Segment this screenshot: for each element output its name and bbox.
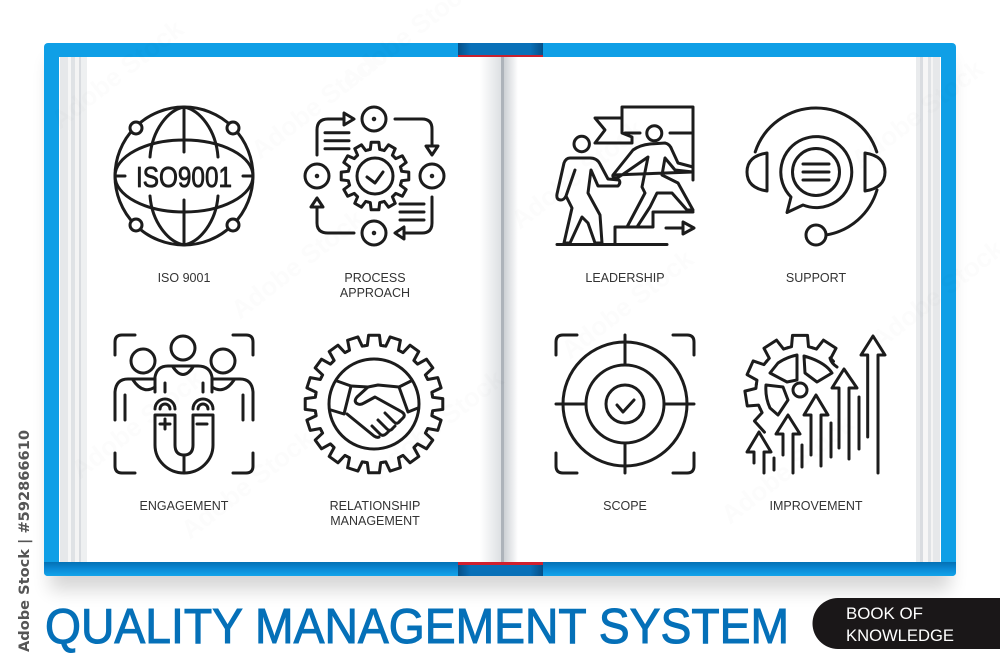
- label: process approach: PROCESS: [344, 271, 406, 285]
- label: improvement: IMPROVEMENT: [769, 499, 863, 513]
- label: ISO 9001: ISO 9001: [158, 271, 210, 285]
- bookmark bottom: [458, 562, 543, 565]
- icon: support headset: [747, 108, 885, 245]
- bookmark top: [458, 55, 543, 57]
- gutter: [480, 57, 518, 562]
- label: scope: SCOPE: [603, 499, 647, 513]
- right page edges: [916, 57, 940, 562]
- label: relationship management: RELATIONSHIP: [330, 499, 420, 513]
- spine top: [458, 43, 543, 55]
- watermark: [45, 0, 1000, 545]
- icon: leadership: [557, 107, 694, 244]
- book cover: [44, 43, 956, 576]
- label: support: SUPPORT: [786, 271, 846, 285]
- title: QUALITY MANAGEMENT SYSTEM: [45, 600, 789, 654]
- icon: relationship management gear: [305, 335, 443, 473]
- icon: improvement gear and arrows: [744, 335, 885, 473]
- book shadow: [50, 60, 950, 590]
- pages: [59, 57, 941, 562]
- badge: book of knowledge: BOOK OF: [846, 604, 923, 623]
- open book: [44, 43, 956, 576]
- icon: engagement: [115, 335, 253, 473]
- icon: process approach: [305, 107, 444, 245]
- badge: book of knowledge: KNOWLEDGE: [846, 626, 954, 645]
- spine bottom: [458, 565, 543, 576]
- cover bottom edge: [44, 562, 956, 576]
- label: process approach: APPROACH: [340, 286, 410, 300]
- badge: book of knowledge: [813, 598, 1000, 649]
- left page edges: [60, 57, 87, 562]
- label: leadership: LEADERSHIP: [585, 271, 665, 285]
- icon: ISO 9001 globe: ISO9001: [136, 162, 232, 194]
- label: relationship management: MANAGEMENT: [330, 514, 420, 528]
- label: engagement: ENGAGEMENT: [140, 499, 229, 513]
- icon: scope target: [556, 335, 694, 473]
- icon: ISO 9001 globe: [115, 107, 253, 245]
- stock id vertical text: Adobe Stock | #592866610: [17, 430, 33, 652]
